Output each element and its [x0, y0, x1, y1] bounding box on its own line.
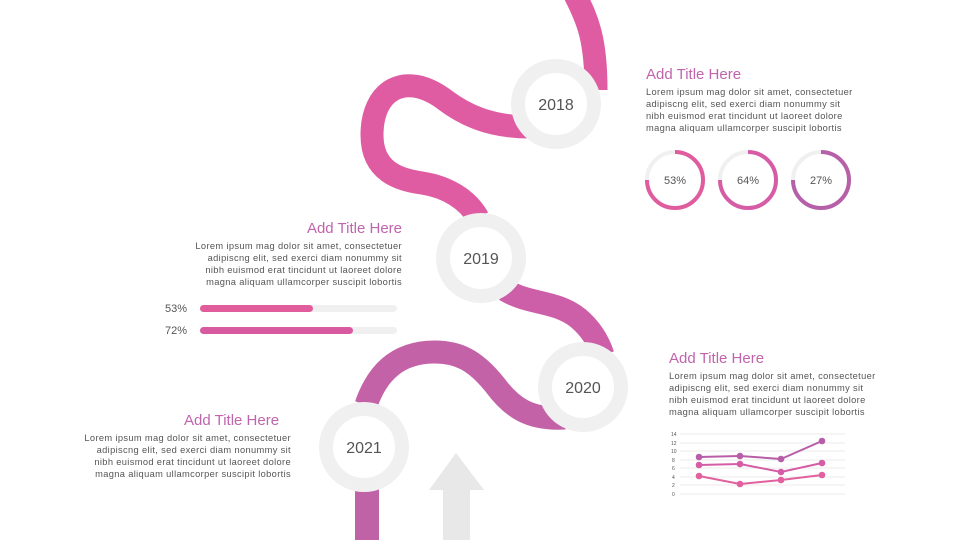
ring 53%: 53%	[664, 175, 686, 187]
line chart: 14	[671, 432, 677, 438]
path segment top	[575, 0, 596, 90]
progress bars	[165, 303, 397, 337]
text block 2019: Lorem ipsum mag dolor sit amet, consectetuer	[195, 241, 402, 251]
ring 64%	[720, 152, 776, 208]
line chart	[671, 432, 845, 498]
node 2020	[545, 349, 621, 425]
line chart: 12	[671, 441, 677, 447]
node 2021	[326, 409, 402, 485]
node 2018	[518, 66, 594, 142]
text block 2019	[195, 220, 402, 287]
text block 2018	[646, 66, 853, 133]
text block 2021	[84, 412, 291, 479]
text block 2020: nibh euismod erat tincidunt ut laoreet dolore	[669, 395, 866, 405]
line chart: 6	[672, 466, 675, 472]
node 2018: 2018	[538, 97, 574, 114]
line chart: 8	[672, 458, 675, 464]
text block 2018: magna aliquam ullamcorper suscipit lobortis	[646, 123, 842, 133]
line chart: 4	[672, 475, 675, 481]
node 2019: 2019	[463, 251, 499, 268]
text block 2019: magna aliquam ullamcorper suscipit lobortis	[206, 277, 402, 287]
text block 2021: Add Title Here	[184, 412, 279, 429]
ring 53%	[647, 152, 703, 208]
line chart: 10	[671, 449, 677, 455]
text block 2021: nibh euismod erat tincidunt ut laoreet dolore	[94, 457, 291, 467]
path segment bottom	[355, 485, 379, 540]
arrow up	[429, 453, 484, 540]
text block 2019: Add Title Here	[307, 220, 402, 237]
text block 2020: adipiscng elit, sed exerci diam nonummy sit	[669, 383, 863, 393]
path segment 2020 to 2021	[366, 352, 565, 418]
text block 2019: adipiscng elit, sed exerci diam nonummy sit	[208, 253, 402, 263]
text block 2020: magna aliquam ullamcorper suscipit lobortis	[669, 407, 865, 417]
ring 27%: 27%	[810, 175, 832, 187]
line chart: 2	[672, 483, 675, 489]
text block 2020: Lorem ipsum mag dolor sit amet, consectetuer	[669, 371, 876, 381]
text block 2018: Add Title Here	[646, 66, 741, 83]
node 2020: 2020	[565, 380, 601, 397]
text block 2019: nibh euismod erat tincidunt ut laoreet dolore	[205, 265, 402, 275]
node 2021: 2021	[346, 440, 382, 457]
ring 27%	[793, 152, 849, 208]
path segment 2019 to 2020	[505, 290, 603, 355]
text block 2020	[669, 350, 876, 417]
text block 2020: Add Title Here	[669, 350, 764, 367]
text block 2021: adipiscng elit, sed exerci diam nonummy sit	[97, 445, 291, 455]
node 2019	[443, 220, 519, 296]
line chart: 0	[672, 492, 675, 498]
text block 2018: Lorem ipsum mag dolor sit amet, consectetuer	[646, 87, 853, 97]
text block 2021: Lorem ipsum mag dolor sit amet, consectetuer	[84, 433, 291, 443]
path segment 2018 to 2019	[372, 86, 530, 218]
progress bars: 53%	[165, 303, 187, 315]
ring 64%: 64%	[737, 175, 759, 187]
text block 2018: adipiscng elit, sed exerci diam nonummy sit	[646, 99, 840, 109]
text block 2018: nibh euismod erat tincidunt ut laoreet dolore	[646, 111, 843, 121]
progress bars: 72%	[165, 325, 187, 337]
text block 2021: magna aliquam ullamcorper suscipit lobortis	[95, 469, 291, 479]
